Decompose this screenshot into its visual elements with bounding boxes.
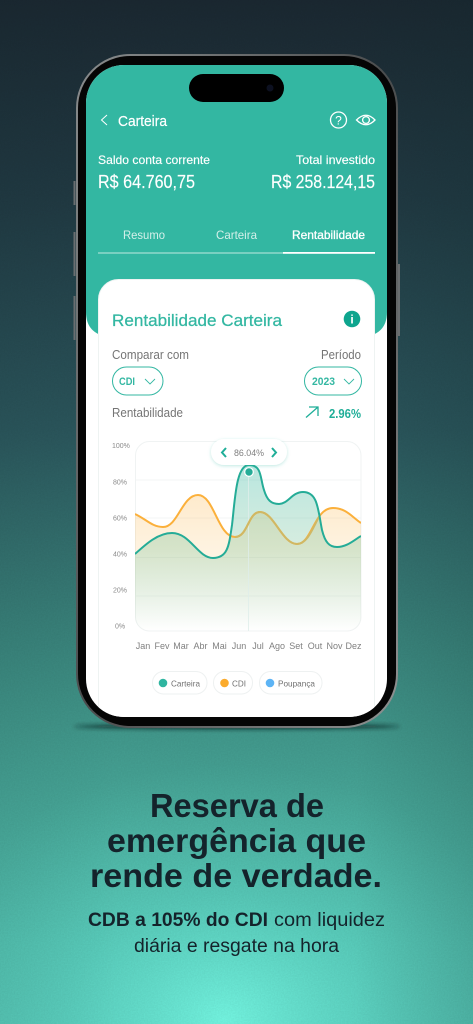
balance: total: R$ 258.124,15 [271,172,375,192]
CDI area [135,496,361,608]
month labels: Mar [173,641,189,651]
month labels: Set [289,641,303,651]
legend [152,672,322,694]
month labels: Out [308,641,323,651]
headline [90,787,382,894]
tabs [98,228,375,254]
rentabilidade label: Rentabilidade [112,406,183,420]
legend: cdi: CDI [232,678,246,688]
icon: help [330,112,346,128]
legend: carteira [152,672,207,694]
line chart [112,439,362,651]
tabs: Rentabilidade [292,228,365,242]
legend: poupança [260,672,322,694]
plot area [135,442,361,631]
subheading: CDB a 105% do CDI [88,910,268,931]
panel: rentabilidade card [98,280,374,750]
carteira line [135,465,361,558]
icon: info [344,311,360,327]
y axis labels: 100% [112,443,130,450]
phone frame [76,54,398,728]
headline: Reserva de [150,787,324,824]
y axis labels: 0% [115,624,125,630]
month labels: Abr [193,641,208,651]
headline: emergência que [107,822,366,859]
teal header [86,65,387,337]
legend: cdi [214,672,252,694]
month labels [136,642,362,651]
month labels: Ago [269,641,285,651]
month labels: Jun [232,641,246,651]
balance: saldo [98,153,210,192]
dropdown: 2023 [304,367,362,395]
subheading: com liquidez [274,910,385,931]
icon: up arrow [306,407,318,418]
balance: saldo: R$ 64.760,75 [98,172,195,192]
headline: rende de verdade. [90,857,382,894]
legend: poupança: Poupança [278,678,315,688]
phone shadow [74,724,400,729]
tooltip [211,439,287,465]
y axis labels [112,443,130,630]
period label: Período [321,348,361,362]
month labels: Dez [345,641,362,651]
dropdown: CDI [112,367,163,395]
phone [74,54,400,750]
tabs: Carteira [216,228,257,242]
tabs: Resumo [123,228,165,242]
month labels: Nov [326,641,343,651]
CDI line [135,495,361,544]
dropdown: 2023: 2023 [312,376,335,388]
dynamic island [189,74,284,102]
balance: total: Total investido [296,153,375,167]
month labels: Fev [154,641,170,651]
screen [86,65,387,750]
balance: saldo: Saldo conta corrente [98,153,210,167]
carteira area [135,465,361,631]
month labels: Jan [136,641,150,651]
y axis labels: 80% [113,480,127,486]
icon: eye [356,115,375,125]
dropdown: CDI: CDI [119,376,135,388]
balance: total [272,155,375,190]
y axis labels: 20% [113,588,127,594]
y axis labels: 60% [113,516,127,522]
side buttons [74,181,400,340]
icon: info: i [350,312,354,326]
tooltip: 86.04% [234,448,264,458]
legend: carteira: Carteira [171,678,200,688]
nav title: Carteira [118,114,168,130]
card title: Rentabilidade Carteira [112,311,283,330]
rentabilidade value: 2.96% [329,407,361,421]
icon: help: ? [335,113,342,127]
nav title [100,114,168,126]
month labels: Mai [212,641,227,651]
subheading [88,910,385,957]
month labels: Jul [252,641,264,651]
selected point [245,468,253,476]
y axis labels: 40% [113,552,127,558]
subheading: diária e resgate na hora [134,936,339,957]
compare label: Comparar com [112,348,189,362]
